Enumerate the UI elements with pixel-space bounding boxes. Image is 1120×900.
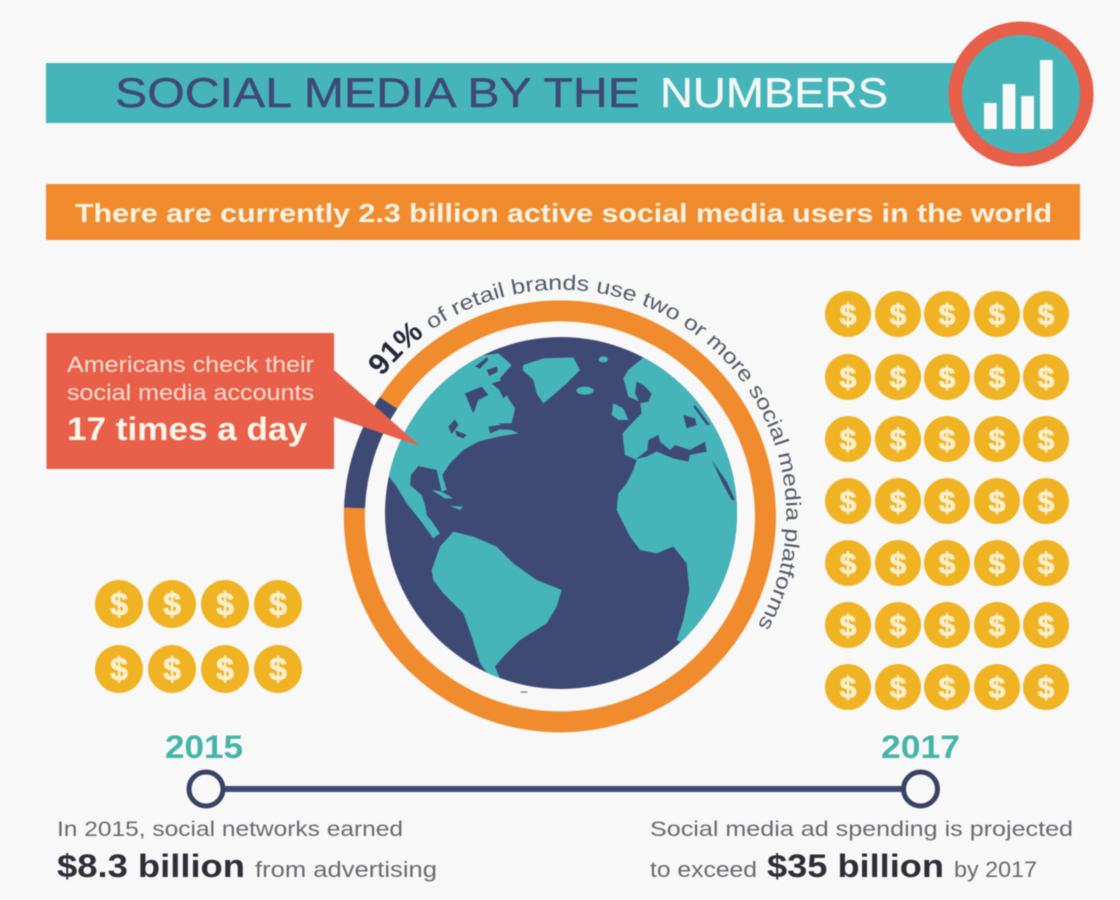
text: 2017 projection: by 2017 xyxy=(954,857,1037,882)
coins: 2017: $ xyxy=(939,362,956,395)
coins: 2017: $ xyxy=(840,548,857,581)
text: 2017 projection: Social media ad spending is projected xyxy=(650,818,1073,841)
coins: 2017: $ xyxy=(989,362,1006,395)
coins: 2017: $ xyxy=(989,672,1006,705)
coins: 2017: $ xyxy=(1038,486,1055,519)
coins: 2017: $ xyxy=(939,610,956,643)
coins: 2017: $ xyxy=(890,486,907,519)
text: 2017 projection: to exceed xyxy=(650,857,757,882)
globe ring xyxy=(354,311,765,722)
callout: Americans check their xyxy=(67,352,314,377)
coins: 2015: $ xyxy=(269,586,287,622)
text: 2015 earnings: from advertising xyxy=(255,857,437,882)
title: SOCIAL MEDIA BY THE xyxy=(115,69,640,116)
coins: 2017: $ xyxy=(989,486,1006,519)
coins: 2017 xyxy=(825,291,1069,710)
subtitle banner: There are currently 2.3 billion active social media users in the world xyxy=(75,198,1052,228)
text: 2015 earnings: $8.3 billion xyxy=(57,848,245,884)
year 2017: 2017 xyxy=(881,729,960,765)
globe xyxy=(384,336,738,694)
coins: 2017: $ xyxy=(939,486,956,519)
coins: 2017: $ xyxy=(890,362,907,395)
text: 2017 projection xyxy=(650,818,1073,884)
coins: 2017: $ xyxy=(939,548,956,581)
coins: 2015: $ xyxy=(163,651,181,687)
coins: 2017: $ xyxy=(890,548,907,581)
coins: 2015 xyxy=(95,580,302,693)
coins: 2017: $ xyxy=(989,424,1006,457)
coins: 2017: $ xyxy=(840,362,857,395)
coins: 2017: $ xyxy=(989,610,1006,643)
coins: 2017: $ xyxy=(840,672,857,705)
coins: 2017: $ xyxy=(1038,424,1055,457)
coins: 2015: $ xyxy=(269,651,287,687)
callout: social media accounts xyxy=(67,380,314,405)
curved text: of retail brands: of retail brands use two or more social media platforms xyxy=(427,274,802,630)
text: 2017 projection: $35 billion xyxy=(767,848,944,884)
icon: bar chart badge xyxy=(955,28,1087,160)
callout: 17 times a day xyxy=(67,411,307,447)
coins: 2017: $ xyxy=(1038,299,1055,332)
coins: 2017: $ xyxy=(840,610,857,643)
coins: 2017: $ xyxy=(1038,548,1055,581)
header banner xyxy=(46,63,961,123)
coins: 2017: $ xyxy=(939,424,956,457)
callout xyxy=(46,333,420,469)
coins: 2017: $ xyxy=(989,548,1006,581)
text: 2015 earnings xyxy=(57,818,437,884)
curved text: 91%: 91% xyxy=(368,322,423,374)
coins: 2017: $ xyxy=(1038,362,1055,395)
coins: 2017: $ xyxy=(840,486,857,519)
coins: 2017: $ xyxy=(939,672,956,705)
coins: 2017: $ xyxy=(1038,610,1055,643)
coins: 2017: $ xyxy=(840,299,857,332)
coins: 2017: $ xyxy=(890,299,907,332)
coins: 2015: $ xyxy=(216,651,234,687)
coins: 2017: $ xyxy=(989,299,1006,332)
coins: 2015: $ xyxy=(110,651,128,687)
timeline xyxy=(165,729,960,806)
coins: 2015: $ xyxy=(163,586,181,622)
title highlight: NUMBERS xyxy=(660,69,888,116)
coins: 2015: $ xyxy=(216,586,234,622)
coins: 2015: $ xyxy=(110,586,128,622)
coins: 2017: $ xyxy=(1038,672,1055,705)
subtitle banner xyxy=(46,184,1080,240)
coins: 2017: $ xyxy=(939,299,956,332)
coins: 2017: $ xyxy=(840,424,857,457)
coins: 2017: $ xyxy=(890,672,907,705)
coins: 2017: $ xyxy=(890,424,907,457)
year 2015: 2015 xyxy=(165,729,243,765)
text: 2015 earnings: In 2015, social networks earned xyxy=(57,818,403,841)
coins: 2017: $ xyxy=(890,610,907,643)
